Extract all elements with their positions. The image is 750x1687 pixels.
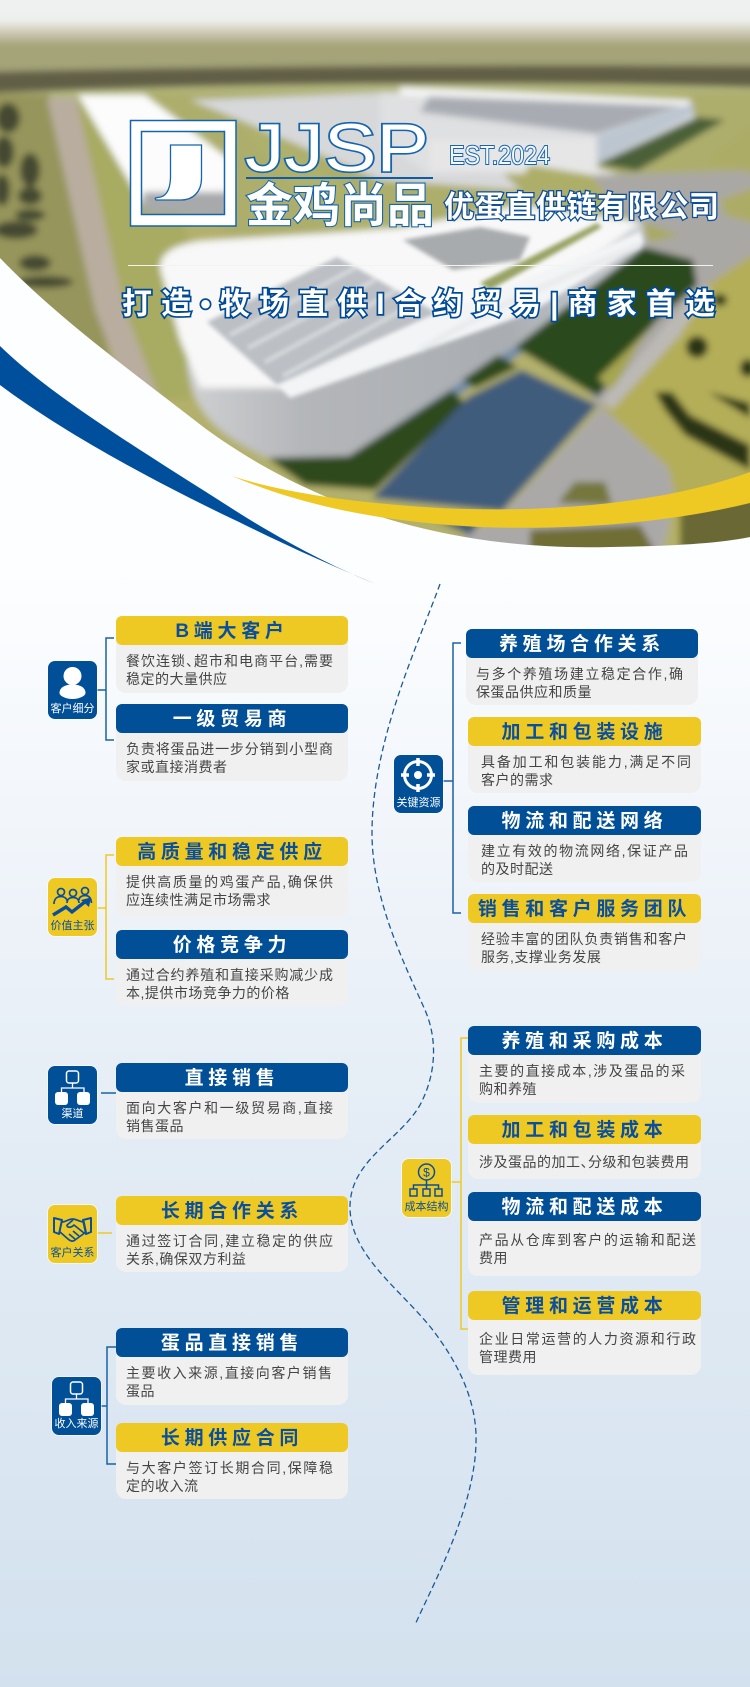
roof stripes <box>207 223 643 398</box>
icon: cost structure: $ <box>423 1166 430 1180</box>
card: long-term supply contracts: 定的收入流 <box>126 1478 198 1494</box>
card: direct egg sales <box>116 1328 348 1405</box>
card: sales team <box>468 894 701 971</box>
card: direct sales: 销售蛋品 <box>126 1118 184 1134</box>
icon: customer segments: 客户细分 <box>50 703 94 715</box>
card: price competitiveness <box>116 930 348 1006</box>
card: farming costs: 养殖和采购成本 <box>502 1031 667 1052</box>
panel: revenue streams <box>51 1328 348 1499</box>
established year: EST.2024 <box>449 140 550 170</box>
main building wall <box>187 222 645 458</box>
card: farming costs: 购和养殖 <box>479 1080 537 1096</box>
card: long-term cooperation: 关系,确保双方利益 <box>126 1250 246 1266</box>
icon: channels <box>48 1066 97 1124</box>
card: high quality supply: 提供高质量的鸡蛋产品,确保供 <box>126 874 333 890</box>
large lawn <box>268 390 465 490</box>
card: logistics network: 物流和配送网络 <box>502 811 667 832</box>
background photo: blurred factory aerial view <box>0 0 750 548</box>
card: logistics costs: 物流和配送成本 <box>502 1197 667 1218</box>
card: logistics costs: 费用 <box>479 1250 508 1266</box>
card: logistics network <box>468 806 701 882</box>
gray plaza <box>459 406 679 546</box>
card: farm partnerships: 保蛋品供应和质量 <box>476 684 592 700</box>
main building roof <box>160 205 640 388</box>
card: long-term supply contracts: 长期供应合同 <box>161 1428 303 1449</box>
card: farming costs: 主要的直接成本,涉及蛋品的采 <box>479 1063 685 1079</box>
card: sales team: 经验丰富的团队负责销售和客户 <box>481 931 687 947</box>
card: B-end clients <box>116 616 348 693</box>
card: processing facilities: 加工和包装设施 <box>502 722 667 743</box>
right pavement and field <box>588 166 750 410</box>
panel: customer relationships <box>47 1196 348 1272</box>
card: direct sales: 直接销售 <box>185 1068 279 1089</box>
panel: key resources <box>394 629 701 964</box>
icon: value proposition: 价值主张 <box>50 920 94 932</box>
olive ground behind buildings <box>149 91 750 116</box>
card: sales team: 服务,支撑业务发展 <box>481 948 601 964</box>
card: logistics network: 的及时配送 <box>481 860 554 876</box>
small lawn <box>462 355 518 388</box>
card: high quality supply: 应连续性满足市场需求 <box>126 892 271 908</box>
icon: value proposition <box>48 878 97 936</box>
card: direct sales: 面向大客户和一级贸易商,直接 <box>126 1100 333 1116</box>
card: sales team: 销售和客户服务团队 <box>478 899 691 920</box>
icon: cost structure: 成本结构 <box>404 1201 448 1213</box>
card: farming costs <box>468 1026 701 1103</box>
card: long-term supply contracts: 与大客户签订长期合同,保障稳 <box>126 1460 333 1476</box>
icon: cost structure <box>402 1159 451 1217</box>
icon: revenue streams <box>52 1377 101 1435</box>
card: farm partnerships: 与多个养殖场建立稳定合作,确 <box>476 666 683 682</box>
middle buildings <box>190 92 520 190</box>
card: price competitiveness: 本,提供市场竞争力的价格 <box>126 984 290 1000</box>
card: logistics network: 建立有效的物流网络,保证产品 <box>481 843 688 859</box>
icon: handshake: 客户关系 <box>50 1247 94 1259</box>
left long building <box>78 95 232 218</box>
pond <box>372 370 597 511</box>
icon: channels: 渠道 <box>62 1108 84 1120</box>
card: processing facilities: 具备加工和包装能力,满足不同 <box>481 754 691 770</box>
slogan: 打造•牧场直供I合约贸易|商家首选 <box>122 288 715 321</box>
card: farm partnerships <box>466 629 698 705</box>
card: processing costs: 涉及蛋品的加工、分级和包装费用 <box>479 1154 689 1170</box>
card: price competitiveness: 价格竞争力 <box>173 935 291 956</box>
dark green lawn <box>515 247 697 397</box>
olive verge <box>77 100 188 400</box>
company name: 优蛋直供链有限公司 <box>444 191 719 224</box>
card: primary traders <box>116 704 348 781</box>
card: long-term cooperation <box>116 1196 348 1272</box>
tree line <box>0 65 750 94</box>
card: primary traders: 一级贸易商 <box>173 709 291 730</box>
card: logistics costs <box>468 1192 701 1276</box>
logo emblem <box>130 120 237 227</box>
card: high quality supply: 高质量和稳定供应 <box>137 842 327 863</box>
card: management costs: 管理费用 <box>479 1348 537 1364</box>
yellow swoosh <box>232 472 750 528</box>
logo rule <box>246 177 433 179</box>
panel: customer segments <box>48 616 348 781</box>
card: direct egg sales: 主要收入来源,直接向客户销售 <box>126 1365 332 1381</box>
card: price competitiveness: 通过合约养殖和直接采购减少成 <box>126 967 333 983</box>
panel: channels <box>47 1063 348 1139</box>
blue swoosh <box>0 346 374 584</box>
blue-ish lower wall edge <box>404 344 526 424</box>
card: processing costs <box>468 1115 701 1179</box>
icon: customer segments <box>48 661 97 719</box>
card: primary traders: 负责将蛋品进一步分销到小型商 <box>126 741 333 757</box>
card: primary traders: 家或直接消费者 <box>126 758 228 774</box>
card: management costs <box>468 1291 701 1375</box>
card: long-term cooperation: 通过签订合同,建立稳定的供应 <box>126 1233 333 1249</box>
card: direct egg sales: 蛋品直接销售 <box>161 1333 303 1354</box>
card: long-term cooperation: 长期合作关系 <box>161 1201 303 1222</box>
card: management costs: 管理和运营成本 <box>502 1296 667 1317</box>
icon: revenue streams: 收入来源 <box>54 1418 98 1430</box>
road <box>47 98 165 400</box>
card: processing costs: 加工和包装成本 <box>502 1120 667 1141</box>
card: processing facilities <box>468 717 701 793</box>
card: direct sales <box>116 1063 348 1139</box>
icon: key resources: 关键资源 <box>396 797 440 809</box>
card: processing facilities: 客户的需求 <box>481 772 554 788</box>
upper building <box>380 92 695 175</box>
card: direct egg sales: 蛋品 <box>126 1382 155 1398</box>
pale road <box>602 285 712 410</box>
panel: value proposition <box>47 837 348 1000</box>
card: B-end clients: 餐饮连锁、超市和电商平台,需要 <box>126 653 333 669</box>
card: farm partnerships: 养殖场合作关系 <box>499 634 665 655</box>
card: B-end clients: 稳定的大量供应 <box>126 670 228 686</box>
left field <box>0 90 112 356</box>
right trees <box>655 294 750 470</box>
header divider <box>128 264 713 266</box>
icon: handshake <box>48 1205 97 1263</box>
card: high quality supply <box>116 837 348 917</box>
card: long-term supply contracts <box>116 1423 348 1499</box>
card: logistics costs: 产品从仓库到客户的运输和配送 <box>479 1232 696 1248</box>
panel: cost structure <box>401 1026 701 1375</box>
card: management costs: 企业日常运营的人力资源和行政 <box>479 1331 696 1347</box>
icon: key resources <box>394 755 443 813</box>
card: B-end clients: B端大客户 <box>175 621 289 642</box>
brand name Chinese: 金鸡尚品 <box>246 179 434 232</box>
